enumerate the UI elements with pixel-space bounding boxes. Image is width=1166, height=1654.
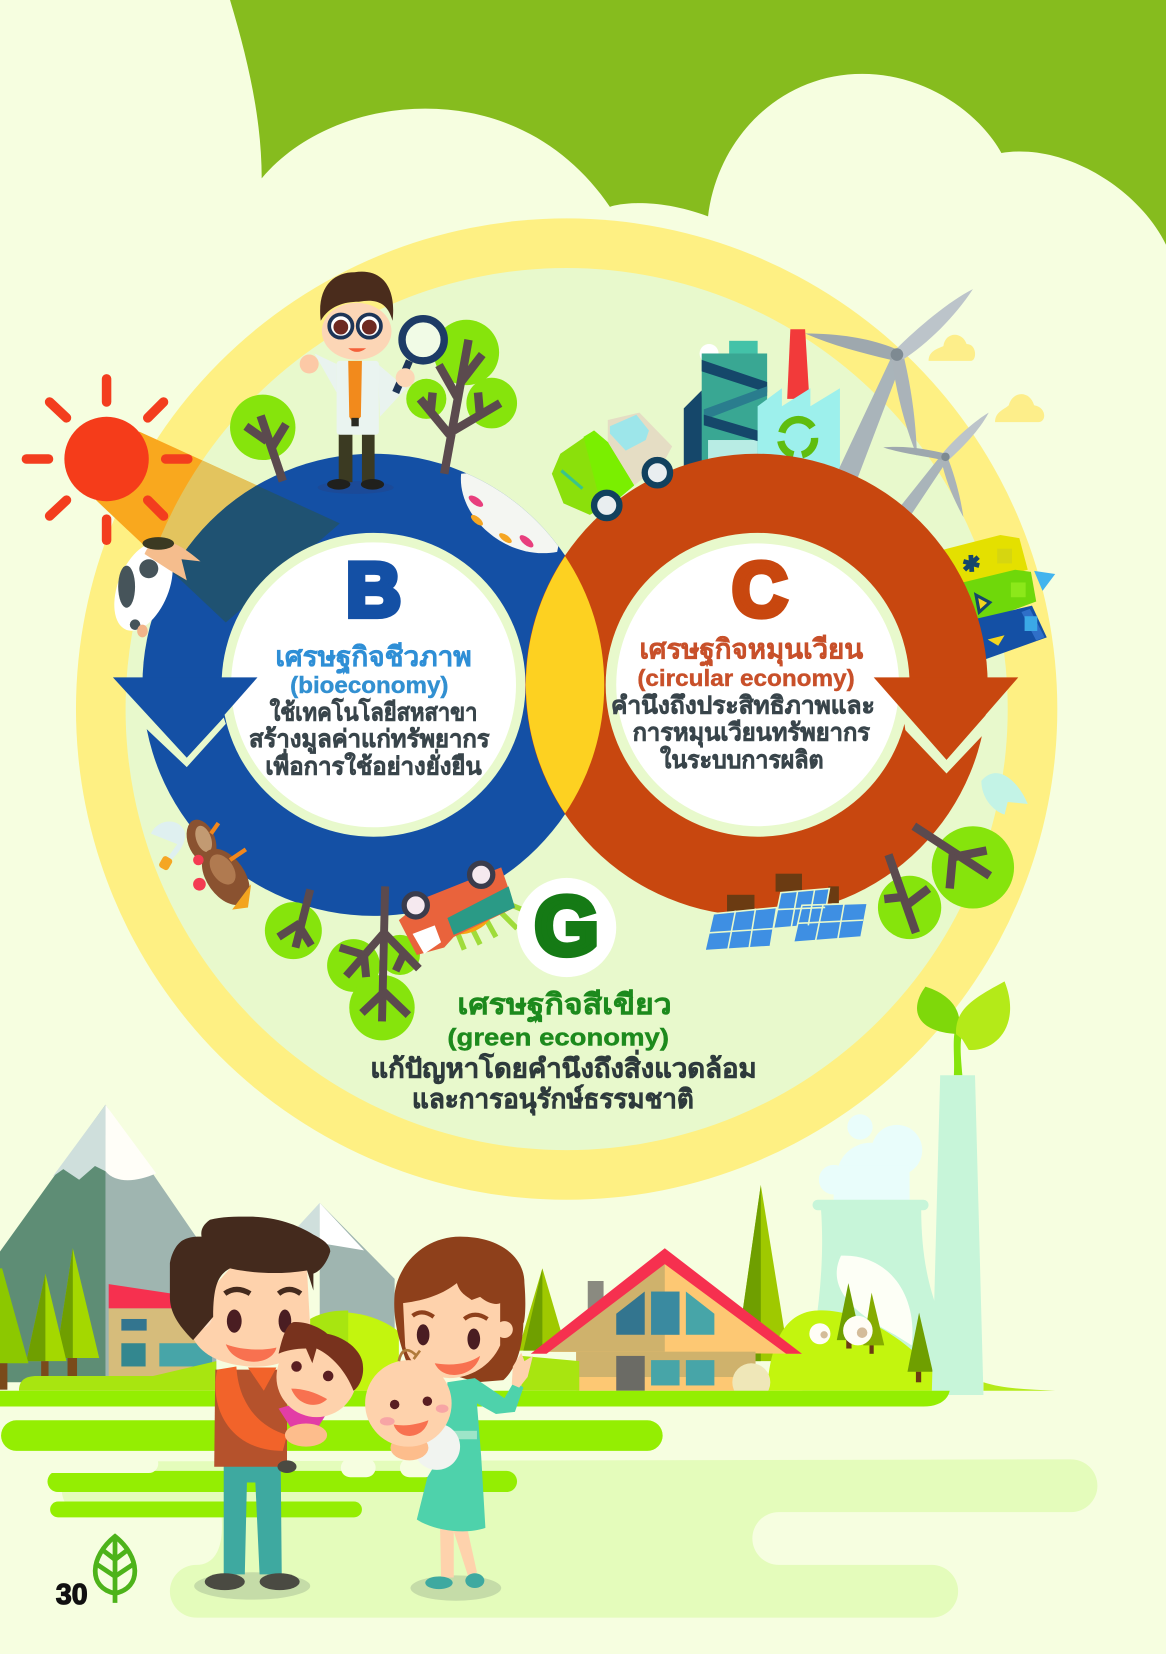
panel: circle B ring <box>142 454 605 916</box>
heading: bioeconomy: (bioeconomy) <box>290 672 448 698</box>
pine trees left <box>0 1248 99 1390</box>
arrow: orange <box>874 677 1018 773</box>
inner pale circle <box>126 268 1008 1150</box>
yellow ring <box>76 218 1057 1200</box>
left building <box>109 1284 212 1378</box>
icon: cow <box>103 534 200 639</box>
arrow: blue <box>113 677 257 767</box>
green cloud header <box>230 0 1166 245</box>
character: man with child <box>170 1217 363 1600</box>
text: bioeconomy description: สร้างมูลค่าแก่ทรัพยากร <box>249 726 490 754</box>
icon: wind clouds <box>929 335 1044 422</box>
beam shade over blue <box>172 486 340 622</box>
heading: green economy <box>447 989 672 1052</box>
icon: recycling factory <box>684 329 840 470</box>
mountain: small <box>295 1203 395 1330</box>
heading: green economy: เศรษฐกิจสีเขียว <box>457 989 672 1023</box>
text: circular economy description: การหมุนเวียนทรัพยากร <box>633 719 870 749</box>
text: green economy description: แก้ปัญหาโดยคำนึงถึงสิ่งแวดล้อม <box>370 1049 757 1084</box>
icon: pale leaf shape <box>981 773 1028 815</box>
icon: overturned orange truck <box>399 863 522 955</box>
power plant chimney <box>932 1075 983 1395</box>
panel: circle C ring <box>525 454 988 916</box>
icon: tree top left <box>230 395 295 481</box>
icon: leaf <box>95 1536 135 1603</box>
text: bioeconomy description <box>249 698 490 781</box>
letter C: C <box>732 548 787 633</box>
right hill with sheep <box>735 1185 934 1391</box>
house <box>518 1248 802 1401</box>
icon: recycled blocks <box>939 535 1055 663</box>
heading: circular economy: (circular economy) <box>637 665 855 691</box>
icon: chickens <box>151 815 260 914</box>
circle C white centre <box>606 533 910 837</box>
icon: trees bottom left <box>265 886 420 1040</box>
icon: scientist <box>300 272 444 494</box>
icon: sun beam <box>96 432 257 550</box>
heading: bioeconomy <box>275 641 472 698</box>
hills <box>19 1311 579 1391</box>
icon: tree top right <box>406 320 517 474</box>
text: circular economy description: คำนึงถึงประสิทธิภาพและ <box>611 692 875 719</box>
thin hill right <box>983 1382 1055 1391</box>
letter B: B <box>346 548 401 633</box>
G badge <box>517 878 616 977</box>
heading: circular economy <box>637 633 863 691</box>
circle B white centre <box>222 533 525 837</box>
cooling tower <box>802 1200 939 1393</box>
icon: big wind turbine <box>805 289 973 480</box>
text: green economy description <box>370 1049 757 1116</box>
heading: bioeconomy: เศรษฐกิจชีวภาพ <box>275 641 472 675</box>
ground stripes <box>0 1391 950 1517</box>
heading: circular economy: เศรษฐกิจหมุนเวียน <box>639 633 863 667</box>
pale ground shape <box>62 1459 1097 1618</box>
icon: trees bottom right <box>878 826 1014 939</box>
text: bioeconomy description: เพื่อการใช้อย่างยั่งยืน <box>265 749 482 781</box>
icon: small wind turbine <box>883 413 989 517</box>
icon: garbage truck <box>552 413 672 518</box>
mountain: large <box>0 1105 216 1382</box>
icon: sun <box>26 379 188 540</box>
heading: green economy: (green economy) <box>447 1025 669 1052</box>
icon: fish pond <box>460 473 558 554</box>
text: bioeconomy description: ใช้เทคโนโลยีสหสาขา <box>270 698 477 727</box>
icon: sprout <box>917 981 1010 1075</box>
character: mother with baby <box>365 1237 533 1601</box>
text: circular economy description: ในระบบการผลิต <box>660 745 824 774</box>
text: circular economy description <box>611 692 875 774</box>
page number: 30 <box>56 1579 88 1611</box>
letter G: G <box>535 880 599 972</box>
overlap lens <box>526 556 604 814</box>
steam <box>819 1114 922 1210</box>
text: green economy description: และการอนุรักษ์ธรรมชาติ <box>412 1084 694 1116</box>
icon: solar panels <box>705 874 867 951</box>
